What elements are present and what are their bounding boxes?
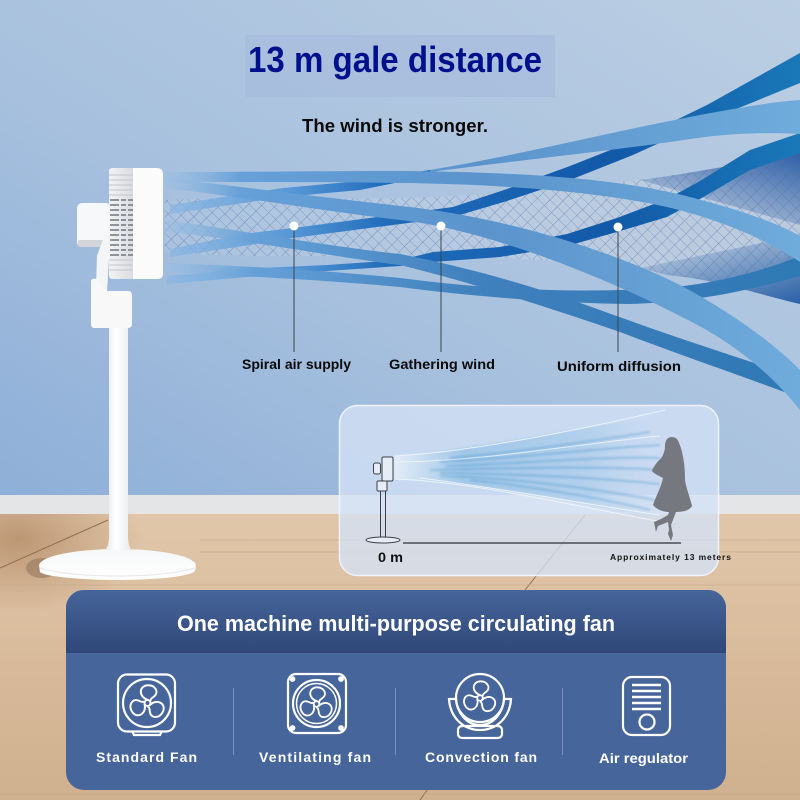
subtitle: The wind is stronger. [302, 116, 488, 136]
dark ribbon to top right [170, 53, 800, 257]
band: lower flat ribbon [167, 256, 800, 304]
wind ribbons and mesh [165, 53, 800, 410]
panel: multi-purpose modes [66, 590, 726, 790]
panel body [66, 590, 726, 790]
motor housing [77, 203, 111, 247]
baseboard [0, 495, 800, 515]
title background [245, 35, 555, 97]
ribbon rising into top light band [170, 170, 430, 214]
mini fan outline [366, 457, 400, 543]
label: convection fan: Convection fan [425, 749, 537, 765]
panel header [66, 590, 726, 653]
icon: standard fan [118, 674, 175, 735]
silhouette woman [652, 437, 692, 541]
label: approximately 13 meters: Approximately 13 meters [610, 552, 731, 562]
wall background [0, 0, 800, 497]
band: descending ribbon [167, 220, 800, 398]
distance line [403, 542, 681, 544]
label: air regulator: Air regulator [599, 750, 689, 766]
callout: spiral air supply: Spiral air supply [242, 356, 351, 372]
icon: ventilating fan [288, 674, 346, 733]
fan bracket [91, 279, 132, 328]
callout: uniform diffusion [557, 222, 681, 374]
wooden floor [0, 514, 800, 800]
mesh sheet [165, 152, 800, 304]
dark ribbon middle [167, 133, 800, 284]
callout: spiral air supply [242, 222, 351, 372]
label: ventilating fan: Ventilating fan [259, 749, 371, 765]
light ribbon long [165, 171, 800, 262]
light ribbon top right [430, 100, 800, 172]
wind cone [394, 410, 665, 522]
fan front shell [133, 168, 163, 279]
fan grille [109, 168, 134, 279]
icon: convection fan [449, 674, 511, 738]
callout: uniform diffusion: Uniform diffusion [557, 358, 681, 374]
label: standard fan: Standard Fan [96, 749, 197, 765]
light ribbon diagonal [165, 178, 800, 410]
callout: gathering wind [389, 222, 495, 372]
callout: gathering wind: Gathering wind [389, 356, 495, 372]
floor fan illustration [26, 168, 196, 580]
label: 0 m: 0 m [378, 549, 403, 565]
fan base [26, 549, 196, 580]
dividers [234, 688, 562, 755]
panel: wind distance [340, 406, 731, 576]
fan arm [96, 220, 110, 292]
panel heading: One machine multi-purpose circulating fan [177, 611, 615, 636]
icon: air regulator [623, 677, 670, 735]
fan pole [105, 325, 132, 550]
title: 13 m gale distance [248, 39, 542, 80]
